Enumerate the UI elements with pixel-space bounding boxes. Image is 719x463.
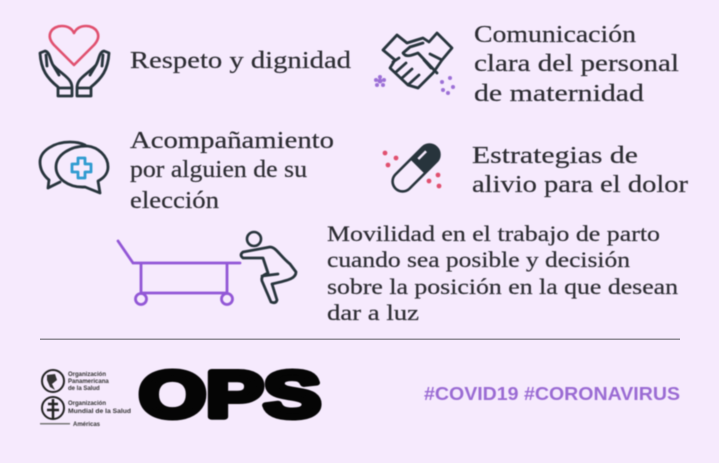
text: Movilidad en el trabajo de parto: dar a luz: [327, 300, 419, 325]
text: Movilidad en el trabajo de parto: sobre la posición en la que desean: [327, 274, 678, 299]
icon: handshake: [374, 33, 455, 95]
text: Estrategias de alivio para el dolor: [472, 143, 688, 198]
text: Comunicación clara del personal de maternidad: de maternidad: [474, 81, 644, 107]
icon: hands holding heart: [40, 26, 109, 96]
divider: [40, 338, 680, 340]
text: Respeto y dignidad: Respeto y dignidad: [130, 48, 351, 74]
text: Comunicación clara del personal de maternidad: [474, 22, 679, 107]
text: Estrategias de alivio para el dolor: Estrategias de: [472, 143, 638, 169]
logo: OPS/OMS emblems: Américas: [73, 422, 101, 428]
logo: OPS/OMS emblems: Organización: [68, 372, 106, 378]
icon: stretcher: [118, 241, 240, 304]
logo: OPS/OMS emblems: [40, 370, 131, 428]
text: Movilidad en el trabajo de parto: cuando sea posible y decisión: [327, 247, 630, 272]
logo: OPS/OMS emblems: de la Salud: [68, 386, 100, 392]
logo: OPS/OMS emblems: Mundial de la Salud: [68, 409, 131, 415]
text: Movilidad en el trabajo de parto: [327, 221, 678, 325]
text: Comunicación clara del personal de maternidad: clara del personal: [474, 51, 679, 77]
text: Acompañamiento por alguien de su elección: por alguien de su: [130, 157, 307, 183]
icon: speech bubbles with medical cross: [40, 142, 108, 193]
logo: OPS/OMS emblems: Organización: [68, 401, 106, 407]
hashtags: #COVID19 #CORONAVIRUS: [424, 384, 680, 404]
logo: OPS: OPS: [139, 358, 321, 431]
logo: OPS/OMS emblems: Panamericana: [68, 379, 109, 385]
text: Acompañamiento por alguien de su elección: elección: [130, 188, 219, 214]
icon: person leaning: [241, 232, 296, 303]
text: Movilidad en el trabajo de parto: Movilidad en el trabajo de parto: [327, 221, 660, 246]
icon: pill capsule: [383, 140, 444, 196]
text: Estrategias de alivio para el dolor: alivio para el dolor: [472, 172, 688, 198]
text: Acompañamiento por alguien de su elección: [130, 128, 334, 214]
text: Comunicación clara del personal de maternidad: Comunicación: [474, 22, 636, 48]
text: Acompañamiento por alguien de su elección: Acompañamiento: [130, 128, 334, 154]
